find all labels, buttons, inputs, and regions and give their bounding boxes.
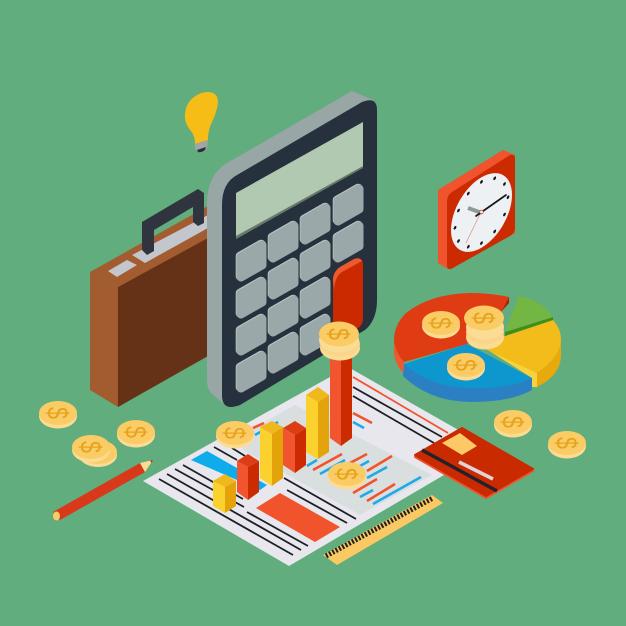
- coin right 1: [494, 410, 532, 438]
- bar 6: [330, 357, 352, 446]
- clock face: [451, 160, 512, 265]
- calculator screen: [236, 122, 363, 239]
- card magnetic strip: [422, 450, 497, 491]
- coin on blue pie slice: $: [449, 359, 483, 371]
- coin right 2: [548, 431, 586, 458]
- card signature strip: [459, 462, 493, 479]
- coin stack on tall bar: [319, 322, 360, 360]
- panel: calculator: [207, 91, 377, 407]
- bar 3: [260, 421, 283, 486]
- bar 4: [283, 421, 306, 473]
- calculator keys: [241, 189, 359, 388]
- coin pair left: [72, 435, 117, 467]
- bar 5: [306, 387, 329, 459]
- coin on blue pie slice: [447, 353, 485, 380]
- coin on red pie slice: [422, 311, 460, 338]
- bar 1: [213, 474, 236, 513]
- blue slice: [403, 344, 532, 402]
- coin on chart area: $: [330, 468, 364, 480]
- red slice: [394, 293, 509, 373]
- calculator red key: [333, 258, 363, 339]
- blue block: [191, 451, 267, 490]
- coin pair left: $: [74, 441, 108, 453]
- coin left 2: $: [119, 426, 153, 438]
- coin on chart area: [328, 462, 366, 490]
- calculator front: [222, 100, 377, 407]
- green slice: [505, 296, 553, 336]
- calculator key highlights: [240, 188, 358, 387]
- coin stack on pie: $: [467, 312, 501, 324]
- coin on red pie slice: $: [424, 317, 458, 329]
- yellow slice: [480, 320, 561, 387]
- coin on paper: [216, 421, 254, 448]
- icon: ruler: [323, 495, 443, 565]
- chart: pie: [394, 293, 561, 402]
- briefcase handle: [142, 189, 204, 255]
- icon: light bulb: [185, 92, 218, 152]
- coin right 2: $: [550, 437, 584, 449]
- icon: pencil: [53, 460, 153, 520]
- coin left 1: [39, 401, 77, 428]
- clock hands: [466, 195, 506, 243]
- coin right 1: $: [496, 416, 530, 428]
- card chip: [442, 433, 477, 455]
- icon: wall clock: [438, 150, 515, 269]
- calculator side: [207, 91, 373, 407]
- shaded chart area: [243, 405, 432, 515]
- text lines: [159, 387, 442, 555]
- coin on paper: $: [218, 427, 252, 439]
- bar chart: [213, 357, 352, 513]
- icon: briefcase: [90, 189, 208, 407]
- red block: [256, 493, 340, 542]
- coin left 2: [117, 420, 155, 448]
- panel: report paper: [143, 367, 490, 566]
- coin stack on pie: [464, 306, 504, 350]
- icon: credit card: [415, 428, 533, 498]
- coin stack on tall bar: $: [322, 328, 356, 340]
- small data bars: [253, 413, 421, 504]
- bar 2: [237, 454, 259, 500]
- coin left 1: $: [41, 407, 75, 419]
